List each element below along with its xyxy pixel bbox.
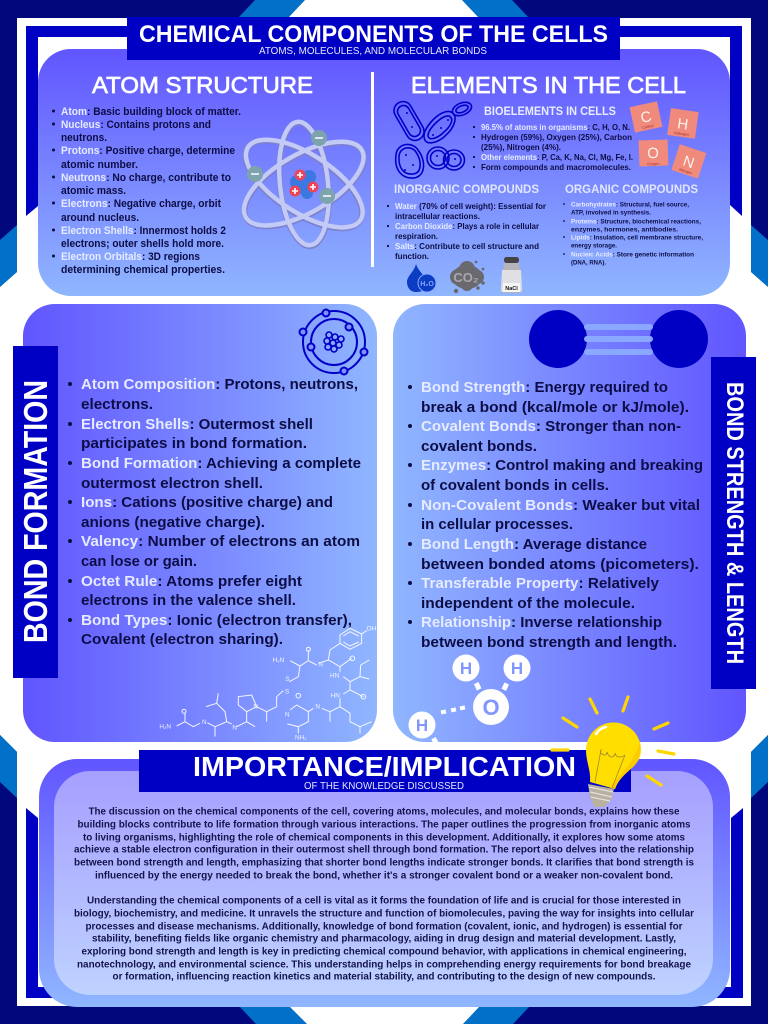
list: organic compounds: Lipids: Insulation, cell membrane structure, bbox=[571, 234, 703, 241]
list: bond strength points: independent of the molecule. bbox=[421, 596, 635, 612]
list: bond strength points: between bonded atoms (picometers). bbox=[421, 557, 699, 573]
icon: water molecule bbox=[408, 654, 530, 746]
list: bioelements: Other elements: P, Ca, K, Na, Cl, Mg, Fe, I. bbox=[481, 153, 633, 162]
list: atom structure: Electron Shells: Innermost holds 2 bbox=[61, 225, 226, 237]
title banner: chemical components of the cells bbox=[127, 17, 620, 60]
heading: elements in the cell: ELEMENTS IN THE CELL bbox=[411, 72, 686, 98]
text block: second paragraph: stability, benefiting fields like organic chemistry and pharmacology, aiding in drug design and material development. Lastly, bbox=[92, 934, 676, 944]
icon: molecular structure bbox=[159, 626, 377, 741]
title banner: chemical components of the cells: ATOMS, MOLECULES, AND MOLECULAR BONDS bbox=[259, 45, 487, 57]
list: organic compounds: (DNA, RNA). bbox=[571, 259, 606, 266]
list: bond formation points: Bond Formation : Achieving a complete bbox=[81, 456, 361, 472]
list: bond formation points: Covalent (electron sharing). bbox=[81, 632, 283, 648]
icon: water molecule: O bbox=[482, 695, 500, 720]
icon: salt shaker bbox=[501, 257, 522, 293]
list: atom structure: Protons: Positive charge, determine bbox=[61, 145, 235, 157]
icon: carbon dioxide cloud bbox=[450, 261, 485, 293]
list: atom structure: electrons; outer shells hold more. bbox=[61, 238, 224, 250]
list: bond strength points: in cellular processes. bbox=[421, 517, 573, 533]
icon: periodic table tiles: O bbox=[647, 145, 659, 162]
title banner: importance: IMPORTANCE/IMPLICATION bbox=[193, 751, 576, 782]
icon: molecular structure: N bbox=[202, 719, 207, 726]
list: bond formation points: electrons in the valence shell. bbox=[81, 593, 296, 609]
icon: atom model bbox=[231, 119, 377, 249]
heading: bioelements: BIOELEMENTS IN CELLS bbox=[484, 104, 616, 118]
icon: molecular structure: N bbox=[315, 703, 320, 710]
list: bioelements: (25%), Nitrogen (4%). bbox=[481, 143, 561, 152]
list: bond strength points: Relationship: Inverse relationship bbox=[421, 615, 662, 631]
icon: water molecule: H bbox=[511, 659, 523, 678]
icon: molecular structure: S bbox=[285, 688, 289, 695]
title banner: importance: OF THE KNOWLEDGE DISCUSSED bbox=[304, 780, 464, 792]
list: bond strength points: Transferable Property : Relatively bbox=[421, 576, 659, 592]
icon: light bulb bbox=[552, 697, 674, 807]
icon: periodic table tiles: Oxygen bbox=[647, 162, 660, 166]
list: organic compounds: ATP, involved in synthesis. bbox=[571, 209, 651, 216]
list: organic compounds bbox=[563, 201, 703, 266]
panel: atom structure and elements in the cell bbox=[38, 49, 730, 296]
list: bond formation points: outermost electron shell. bbox=[81, 476, 263, 492]
heading: atom structure: ATOM STRUCTURE bbox=[92, 72, 313, 98]
text block: first paragraph: The discussion on the chemical components of the cell, covering atoms, molecules, and molecular bonds, explains how these bbox=[88, 806, 680, 818]
list: inorganic compounds: respiration. bbox=[395, 232, 438, 241]
icon: atoms joined by triple bond bbox=[529, 310, 708, 368]
title banner: chemical components of the cells: CHEMICAL COMPONENTS OF THE CELLS bbox=[139, 22, 608, 48]
icon: periodic table tiles: H bbox=[676, 115, 689, 134]
list: bioelements: Form compounds and macromolecules. bbox=[481, 163, 631, 172]
list: bond formation points: can lose or gain. bbox=[81, 554, 197, 570]
text block: second paragraph: Understanding the chemical components of a cell is vital as it forms the foundation of life and is crucial for those interested in bbox=[87, 896, 681, 906]
icon: water drop bbox=[407, 264, 436, 292]
icon: molecular structure: N bbox=[285, 712, 290, 719]
list: atom structure: Electrons: Negative charge, orbit bbox=[61, 198, 221, 210]
list: atom structure: Nucleus: Contains protons and bbox=[61, 119, 211, 131]
list: bond formation points: Valency: Number of electrons an atom bbox=[81, 534, 360, 550]
list: bond strength points: Enzymes: Control making and breaking bbox=[421, 458, 703, 474]
panel: bond formation bbox=[13, 304, 377, 742]
list: inorganic compounds: function. bbox=[395, 252, 429, 261]
icon: molecular structure: N bbox=[318, 662, 323, 669]
list: bond strength points: of covalent bonds in cells. bbox=[421, 478, 609, 494]
list: atom structure: atomic number. bbox=[61, 159, 138, 171]
heading: organic compounds: ORGANIC COMPOUNDS bbox=[565, 184, 698, 196]
icon: periodic table tiles: Hydrogen bbox=[674, 131, 689, 137]
list: organic compounds: Nucleic Acids: Store genetic information bbox=[571, 251, 694, 258]
list: atom structure: neutrons. bbox=[61, 132, 107, 144]
text block: first paragraph: to living organisms, highlighting the role of chemical components in this development. Additionally, it explores how some atoms bbox=[83, 832, 685, 844]
text block: second paragraph: exploring bond strength and length is key in predicting chemical compound behavior, with applications in chemical engineering, bbox=[82, 946, 687, 958]
list: bond formation points: Electron Shells : Outermost shell bbox=[81, 417, 313, 433]
panel: importance and implication bbox=[39, 759, 730, 1007]
panel: bond strength and length bbox=[393, 304, 756, 746]
list: organic compounds: energy storage. bbox=[571, 242, 617, 249]
list: bond formation points: electrons. bbox=[81, 397, 153, 413]
icon: molecular structure: NH₂ bbox=[295, 734, 307, 741]
list: bond formation points: Atom Composition : Protons, neutrons, bbox=[81, 377, 358, 393]
list: bond formation points bbox=[68, 377, 361, 648]
text block: second paragraph bbox=[74, 896, 694, 982]
icon: water molecule: H bbox=[416, 716, 428, 735]
icon: water molecule: H bbox=[460, 659, 472, 678]
icon: molecular structure: H₂N bbox=[273, 657, 285, 664]
list: bond formation points: Bond Types : Ionic (electron transfer), bbox=[81, 613, 352, 629]
list: atom structure: Neutrons: No charge, contribute to bbox=[61, 172, 231, 184]
icon: periodic table tiles: C bbox=[639, 108, 653, 127]
list: bond strength points: between bond strength and length. bbox=[421, 635, 677, 651]
label: bond strength and length bbox=[711, 357, 756, 689]
list: inorganic compounds bbox=[387, 202, 547, 261]
list: atom structure: Atom: Basic building block of matter. bbox=[61, 106, 241, 118]
list: atom structure: around nucleus. bbox=[61, 212, 139, 224]
list: inorganic compounds: intracellular reactions. bbox=[395, 212, 480, 221]
icon: molecular structure: HN bbox=[330, 672, 340, 679]
list: organic compounds: enzymes, hormones, antibodies. bbox=[571, 226, 678, 233]
list: organic compounds: Carbohydrates: Structural, fuel source, bbox=[571, 201, 689, 208]
icon: atom orbit bbox=[300, 310, 368, 374]
list: inorganic compounds: Salts: Contribute to cell structure and bbox=[395, 242, 539, 251]
list: bond strength points: covalent bonds. bbox=[421, 439, 537, 455]
heading: inorganic compounds: INORGANIC COMPOUNDS bbox=[394, 184, 539, 196]
list: bond formation points: Octet Rule : Atoms prefer eight bbox=[81, 574, 302, 590]
list: bond strength points: break a bond (kcal/mole or kJ/mole). bbox=[421, 400, 689, 416]
list: bioelements: Hydrogen (59%), Oxygen (25%), Carbon bbox=[481, 133, 632, 142]
icon: water drop: H₂O bbox=[420, 281, 434, 288]
list: bioelements bbox=[473, 123, 633, 172]
list: bond strength points bbox=[408, 380, 703, 651]
list: bond strength points: Bond Length: Average distance bbox=[421, 537, 647, 553]
list: bond formation points: Ions: Cations (positive charge) and bbox=[81, 495, 333, 511]
text block: first paragraph: achieve a stable electron configuration in their outermost shell through bond formation. The report also delves into the relationship bbox=[74, 844, 694, 856]
icon: molecular structure: N bbox=[232, 724, 237, 731]
icon: periodic table tiles: Nitrogen bbox=[679, 168, 693, 175]
icon: molecular structure: H₂N bbox=[159, 723, 171, 730]
list: atom structure bbox=[52, 106, 241, 276]
text block: second paragraph: or formation, influencing reaction kinetics and material stability, and contributing to the design of new compounds. bbox=[112, 972, 656, 982]
icon: periodic table tiles: Carbon bbox=[642, 124, 654, 130]
list: atom structure: Electron Orbitals: 3D regions bbox=[61, 251, 200, 263]
icon: molecular structure: OH bbox=[367, 626, 377, 633]
list: bond formation points: participates in bond formation. bbox=[81, 436, 307, 452]
text block: second paragraph: nanotechnology, and environmental science. This understanding helps in comprehending energy requirements for bond breakage bbox=[77, 960, 692, 970]
list: bond strength points: Bond Strength: Energy required to bbox=[421, 380, 668, 396]
list: bond strength points: Non-Covalent Bonds : Weaker but vital bbox=[421, 498, 700, 514]
list: bond formation points: anions (negative charge). bbox=[81, 515, 265, 531]
list: bond strength points: Covalent Bonds : Stronger than non- bbox=[421, 419, 681, 435]
icon: periodic table tiles bbox=[630, 101, 706, 179]
list: atom structure: determining chemical properties. bbox=[61, 264, 225, 276]
text block: first paragraph: between bond strength and length, emphasizing that shorter bond lengths indicate stronger bonds. It clarifies that bond strength is bbox=[74, 858, 694, 868]
title banner: importance bbox=[139, 750, 631, 792]
text block: first paragraph: influenced by the energy needed to break the bond, whether it's a stronger covalent bond or a weaker non-covalent bond. bbox=[95, 870, 673, 882]
icon: carbon dioxide cloud: CO₂ bbox=[453, 270, 479, 285]
list: inorganic compounds: Carbon Dioxide: Plays a role in cellular bbox=[395, 222, 540, 231]
icon: periodic table tiles: N bbox=[681, 153, 696, 172]
list: atom structure: atomic mass. bbox=[61, 185, 126, 197]
icon: molecular structure: HN bbox=[331, 692, 340, 699]
label: bond formation: BOND FORMATION bbox=[17, 380, 54, 643]
text block: first paragraph: building blocks contribute to life formation through various interactions. The paper outlines the progression from inorganic atoms bbox=[78, 820, 690, 830]
list: bioelements: 96.5% of atoms in organisms: C, H, O, N. bbox=[481, 123, 630, 132]
icon: cells outline bbox=[391, 98, 474, 178]
list: inorganic compounds: Water (70% of cell weight): Essential for bbox=[395, 202, 547, 211]
text block: second paragraph: processes and disease mechanisms. Additionally, knowledge of bond formation (covalent, ionic, and hydrogen) is essential for bbox=[86, 922, 683, 932]
label: bond strength and length: BOND STRENGTH & LENGTH bbox=[721, 382, 748, 664]
icon: molecular structure: S bbox=[285, 676, 290, 683]
list: organic compounds: Proteins: Structure, biochemical reactions, bbox=[571, 218, 701, 225]
icon: salt shaker: NaCl bbox=[505, 286, 518, 292]
icon: molecular structure: N bbox=[253, 704, 258, 711]
text block: second paragraph: biology, biochemistry, and medicine. It unravels the structure and function of biomolecules, paving the way for insights into cellular bbox=[74, 908, 694, 920]
text block: first paragraph bbox=[74, 806, 694, 882]
